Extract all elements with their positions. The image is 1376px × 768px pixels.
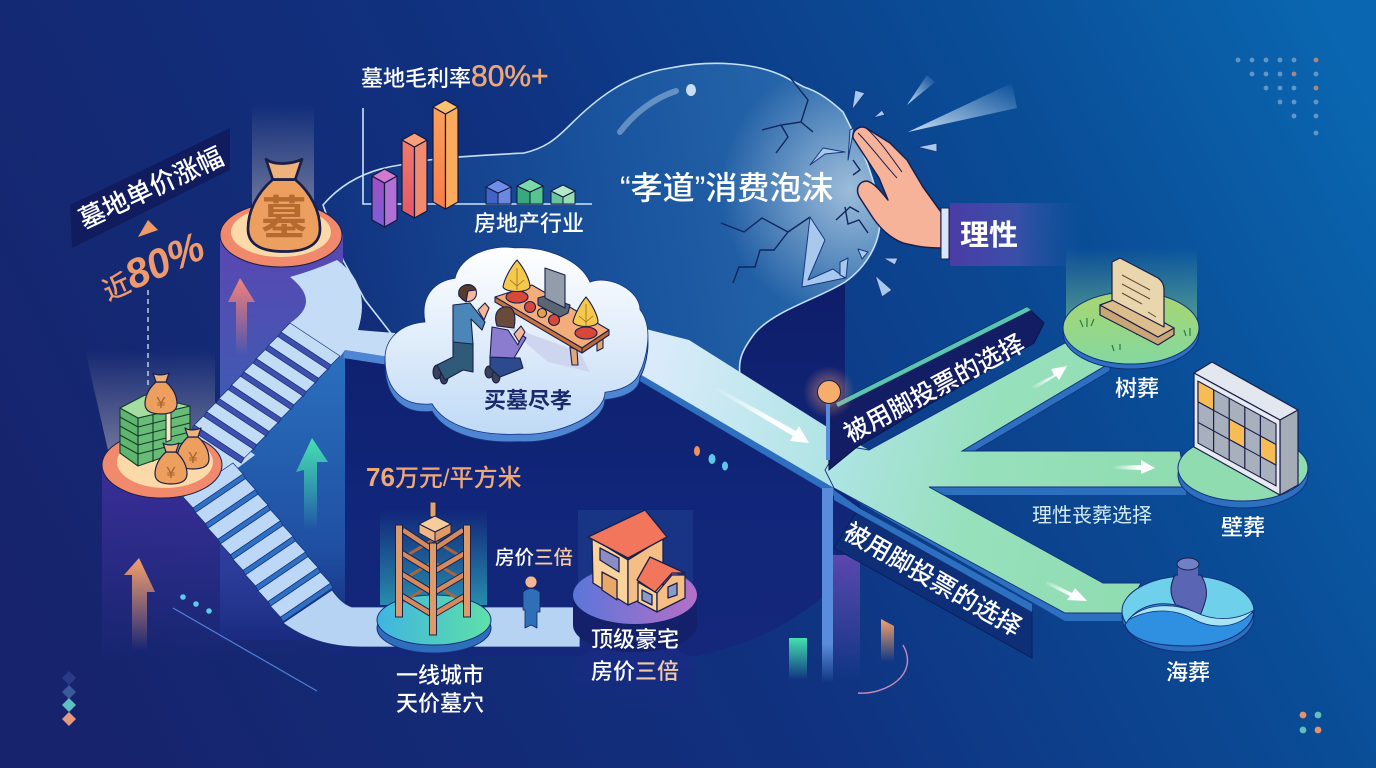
arrow: green up [296,438,328,530]
bar: pale green small [551,185,575,204]
bar: purple [372,169,397,227]
decoration: diamonds bottom left [62,671,76,726]
wave [1125,604,1254,646]
label: sky-high grave: 天价墓穴 [396,691,484,716]
bar: red [402,133,427,218]
wall burial platform [1178,362,1308,508]
sign: upper voting with feet: 被用脚投票的选择 [840,330,1029,448]
sign: lower voting with feet [834,490,1032,658]
label: rational funeral choice: 理性丧葬选择 [1032,504,1152,527]
path from top disc to cloud [290,260,395,366]
dark lower panel [330,270,860,656]
cloud: buy a tomb [385,247,648,442]
heading: filial piety bubble: “孝道”消费泡沫 [620,170,833,206]
rotated label: grave price rise: 墓地单价涨幅 [74,141,228,235]
label: sea burial: 海葬 [1166,660,1210,685]
cracks on bubble [721,75,868,283]
lower stairs [183,463,333,622]
dark pole area decoration and vertical post [822,488,860,683]
label: three times house price: 房价三倍 [495,547,573,569]
kneeling man [433,284,489,384]
value: 76 wan per sqm: 76万元/平方米 [366,462,522,492]
upper stairs [191,323,340,463]
big number: near 80%: 近80% [93,223,211,309]
reason label box: 理性 [960,219,1018,252]
money bag right: ¥ [188,450,198,467]
decoration: dots and diagonal line [173,594,317,691]
arrow: branch right [1112,460,1155,474]
sign: upper voting with feet [828,307,1044,470]
fork branches [825,343,1186,621]
bar: green small [517,179,543,204]
triangle marker [138,220,158,237]
label: luxury mansion: 顶级豪宅 [591,627,679,652]
heading: gross margin 80%+: 墓地毛利率80%+ [361,60,549,93]
decoration: small bars and arc [789,619,907,693]
luxury house plinth [573,510,697,712]
label: real estate: 房地产行业 [474,211,584,236]
sign: lower voting with feet: 被用脚投票的选择 [839,518,1026,642]
tree burial platform [1063,248,1199,369]
top disc [220,203,342,267]
kneeling woman [485,307,526,383]
decoration: dots bottom right [1300,712,1321,733]
lamp post with ball [803,366,855,460]
money bag front: ¥ [166,465,176,482]
chart: gross margin [363,100,592,227]
money bag top: ¥ [156,395,166,412]
lower purple column [102,465,350,660]
tower of graves [377,502,491,653]
tombstone [1100,258,1174,345]
upper purple column [203,235,343,425]
cash stacks [120,395,190,466]
arrow: orange up [124,558,155,650]
blue wall under stairs [220,340,345,640]
text: buy tomb: 买墓尽孝 [484,388,572,413]
cuff [941,208,949,259]
urn [1171,558,1207,618]
grass [1080,318,1190,351]
label: wall burial: 壁葬 [1221,515,1265,540]
label: three times price: 房价三倍 [591,659,679,684]
glass bubble: consumption bubble [323,63,880,375]
bar: orange [433,100,458,209]
chart axes [363,108,592,204]
light rays [907,75,1017,132]
decoration: dot grid top right [1236,58,1318,135]
arrow: pink up [228,278,255,355]
tower frame [399,540,467,604]
shattered shards on bubble [802,90,937,297]
reason label box [950,203,1082,266]
big money bag [220,105,342,267]
tower disc [377,603,491,653]
ramp to the fork [630,325,960,496]
label: tree burial: 树葬 [1115,376,1159,401]
decoration: dots on dark panel [694,446,728,470]
bar: blue small [486,180,511,204]
columbarium wall [1194,362,1298,495]
lower path with curve [283,590,580,647]
small person [523,576,540,628]
big money bag: 墓 [261,192,307,244]
lower disc with money [102,373,222,498]
label: first-tier city: 一线城市 [396,663,484,688]
stair landing [155,420,255,497]
house [588,510,685,612]
arrow: branch down [1046,580,1087,601]
arrow: branch up [1032,366,1067,390]
sea burial platform [1122,558,1254,652]
hand pushing the bubble [853,127,941,248]
altar table [495,260,609,372]
left glow and dashed line [85,290,215,450]
